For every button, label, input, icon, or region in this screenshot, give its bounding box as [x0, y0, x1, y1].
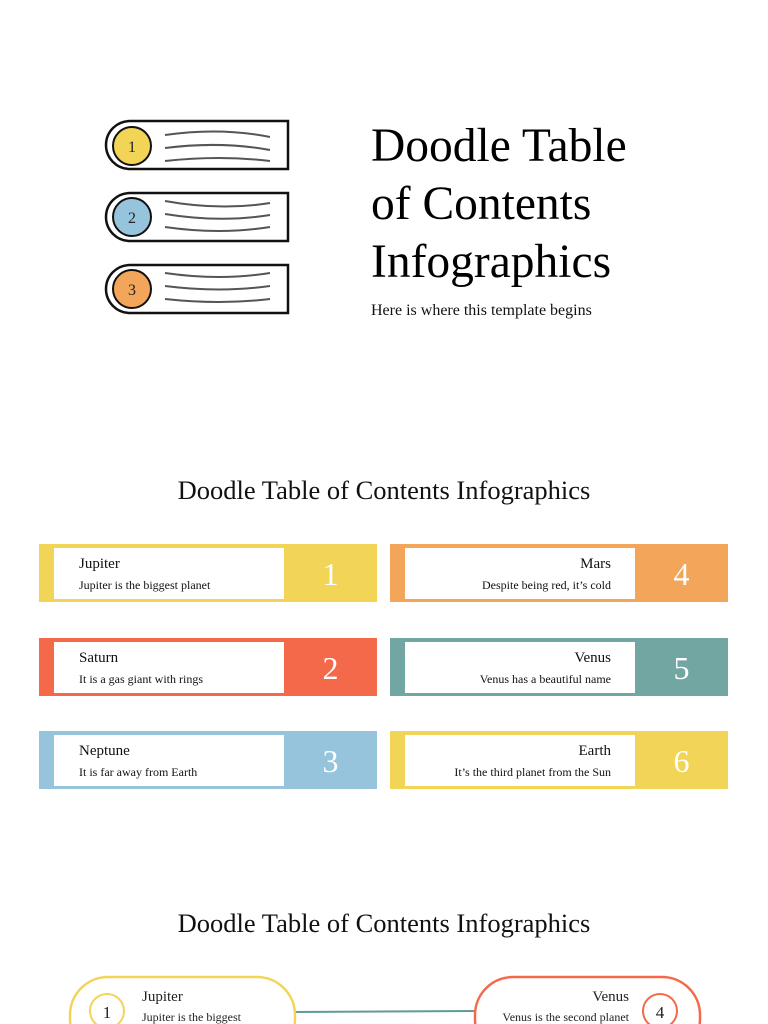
card: Mars	[390, 544, 728, 602]
card: Jupiter: 1	[322, 556, 338, 592]
title	[371, 120, 627, 288]
card: Neptune	[39, 731, 377, 789]
card: Saturn: 2	[322, 650, 338, 686]
card: Venus: Venus	[574, 650, 611, 666]
icon: doodle list: 3	[128, 282, 136, 299]
card: Neptune: It is far away from Earth	[79, 765, 197, 779]
title: Infographics	[371, 236, 611, 288]
heading 3: Doodle Table of Contents Infographics	[178, 908, 590, 938]
card: Neptune: 3	[322, 743, 338, 779]
card: Jupiter: Jupiter	[79, 556, 120, 572]
diagram bottom: Venus is the second planet	[502, 1010, 630, 1024]
card: Earth: Earth	[579, 743, 611, 759]
card: Mars: Mars	[580, 556, 611, 572]
subtitle: Here is where this template begins	[371, 302, 592, 319]
diagram bottom	[68, 976, 702, 1024]
card: Jupiter: Jupiter is the biggest planet	[79, 578, 210, 592]
card: Venus: 5	[674, 650, 690, 686]
card: Mars: 4	[674, 556, 690, 592]
icon: doodle list: 1	[128, 139, 136, 156]
title: of Contents	[371, 178, 591, 230]
card: Saturn	[39, 638, 377, 696]
card: Jupiter	[39, 544, 377, 602]
heading 2: Doodle Table of Contents Infographics	[178, 475, 590, 505]
card: Saturn: It is a gas giant with rings	[79, 672, 203, 686]
card: Neptune: Neptune	[79, 743, 130, 759]
card: Mars: Despite being red, it’s cold	[482, 578, 611, 592]
card: Venus	[390, 638, 728, 696]
diagram bottom: 4	[656, 1003, 665, 1022]
card: Earth: 6	[674, 743, 690, 779]
card: Earth: It’s the third planet from the Sun	[454, 765, 611, 779]
icon: doodle list: 2	[128, 210, 136, 227]
icon: doodle list	[104, 120, 290, 314]
diagram bottom: 1	[103, 1003, 111, 1022]
card: Earth	[390, 731, 728, 789]
card: Saturn: Saturn	[79, 650, 118, 666]
diagram bottom: Jupiter	[142, 989, 183, 1005]
card: Venus: Venus has a beautiful name	[480, 672, 611, 686]
title: Doodle Table	[371, 120, 627, 172]
diagram bottom: Venus	[592, 989, 629, 1005]
diagram bottom: Jupiter is the biggest	[142, 1010, 242, 1024]
